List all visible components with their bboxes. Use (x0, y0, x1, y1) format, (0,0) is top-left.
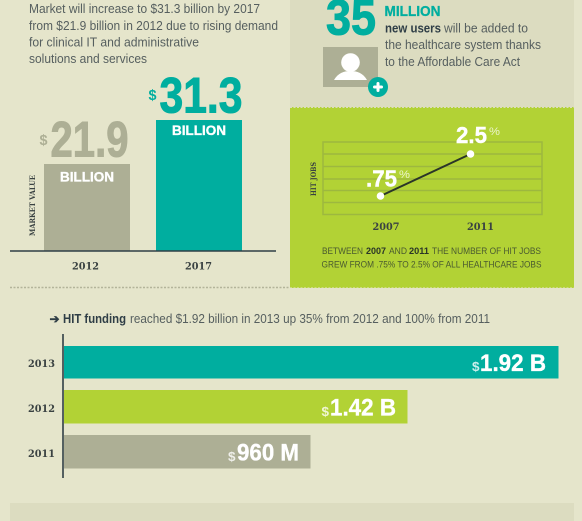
axis label: HIT jobs: HIT JOBS (309, 162, 318, 196)
value: 21.9: $ (40, 132, 48, 149)
caption: THE NUMBER OF HIT JOBS (432, 246, 541, 257)
bar: 2012: 1.42 B (330, 394, 396, 422)
text block: market growth description: Market will increase to $31.3 billion by 2017 (29, 2, 260, 16)
text block: new users: the healthcare system thanks (385, 38, 541, 52)
caption: AND (389, 246, 407, 257)
year labels: 2012 (28, 404, 55, 415)
caption: 2007 (366, 246, 386, 257)
heading: HIT funding: reached $1.92 billion in 2013 up 35% from 2012 and 100% from 2011 (130, 312, 490, 326)
value: 2.5%: 2.5 (456, 122, 487, 148)
bar: 2012 (64, 390, 408, 424)
heading: HIT funding: HIT funding (63, 312, 126, 326)
line chart: HIT jobs growth (377, 150, 474, 200)
year labels: 2011 (467, 222, 494, 233)
value: 31.3: $ (148, 87, 157, 104)
text block: market growth description (29, 2, 278, 66)
year labels (28, 359, 55, 460)
caption: BETWEEN (322, 246, 363, 257)
value: 2.5%: % (489, 126, 500, 138)
bar: 2012: BILLION (60, 168, 114, 184)
year labels: 2011 (28, 449, 55, 460)
text block: market growth description: solutions and services (29, 52, 147, 66)
bar chart: HIT funding (28, 334, 558, 478)
year labels: 2017 (185, 262, 212, 272)
year labels: 2007 (372, 222, 400, 233)
bar: 2013 (64, 346, 558, 378)
value: .75%: % (399, 169, 410, 181)
year labels: 2012 (72, 262, 99, 272)
icon: user plus (323, 47, 388, 97)
caption: GREW FROM .75% TO 2.5% OF ALL HEALTHCARE JOBS (322, 260, 542, 270)
axis (62, 334, 64, 478)
text block: market growth description: for clinical IT and administrative (29, 36, 199, 50)
year labels: 2013 (28, 359, 55, 370)
bar: 2013: 1.92 B (480, 350, 546, 377)
bar: 2011: $ (228, 449, 236, 464)
panel: HIT jobs (290, 107, 574, 288)
text block: new users: to the Affordable Care Act (385, 55, 520, 69)
value: 31.3: 31.3 (160, 68, 242, 124)
bar: 2011: 960 M (237, 440, 299, 466)
caption: 2011 (409, 246, 430, 257)
year labels (372, 222, 494, 233)
heading: million: MILLION (384, 4, 440, 20)
text block: new users: new users (385, 22, 441, 36)
axis label: market value: MARKET VALUE (28, 175, 37, 236)
bar: 2017: BILLION (172, 122, 226, 138)
bar chart: market value 2012 vs 2017 (10, 68, 276, 272)
panel: new users (290, 0, 574, 107)
heading: HIT funding: ➔ (50, 312, 60, 326)
caption (322, 246, 542, 270)
axis (10, 250, 276, 252)
text block: new users: will be added to (443, 22, 528, 36)
bar: 2011 (64, 435, 310, 468)
value: .75%: .75 (366, 166, 397, 192)
bar: 2012: $ (322, 404, 330, 419)
text block: new users (385, 22, 541, 69)
bar: 2017 (156, 120, 242, 251)
panel: bottom (10, 503, 574, 521)
text block: market growth description: from $21.9 billion in 2012 due to rising demand (29, 19, 278, 33)
bar: 2013: $ (472, 359, 480, 374)
year labels (72, 262, 212, 272)
bar: 2012 (44, 164, 130, 251)
value: 21.9: 21.9 (50, 112, 128, 168)
